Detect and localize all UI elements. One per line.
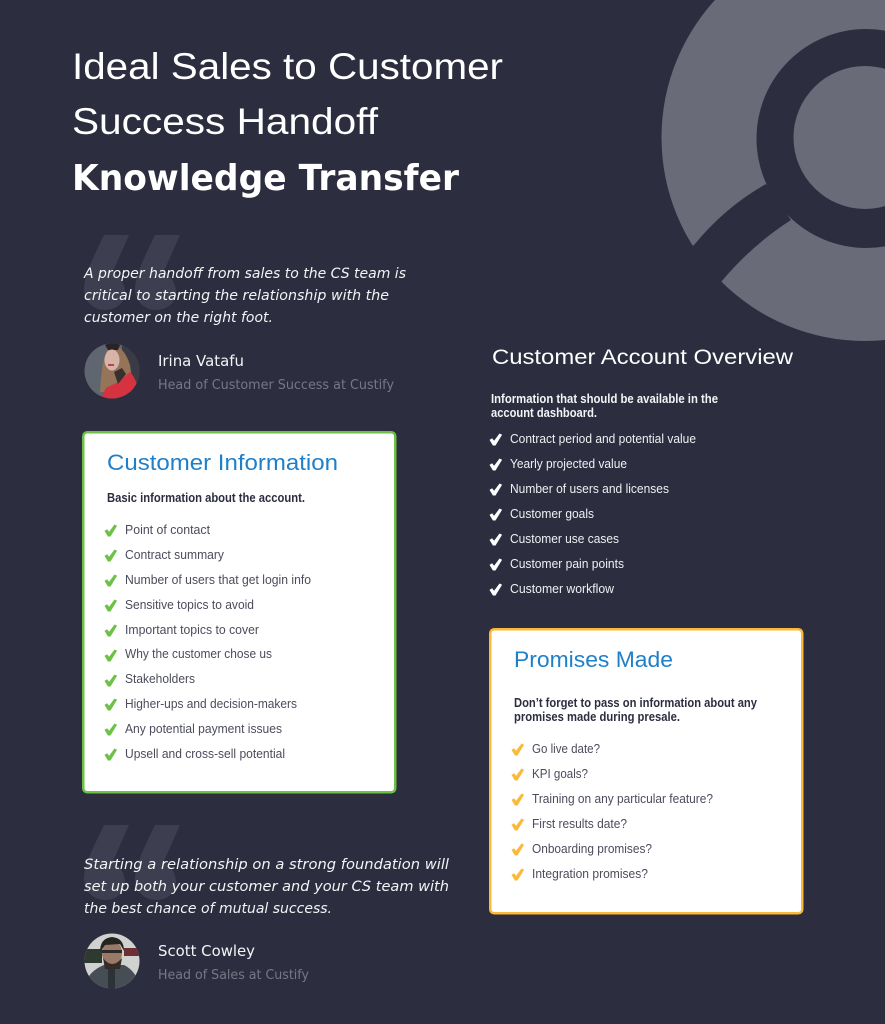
quote text: set up both your customer and your CS team with	[84, 879, 449, 895]
attribution: Irina Vatafu	[158, 352, 244, 370]
quote: Irina Vatafu	[83, 235, 406, 400]
checklist: Important topics to cover	[125, 623, 259, 637]
quote text: critical to starting the relationship with the	[84, 288, 389, 304]
icons: yellow checks	[512, 744, 524, 880]
intro text	[514, 696, 757, 724]
intro text: Basic information about the account.	[107, 491, 305, 505]
checklist: Point of contact	[125, 523, 211, 537]
checklist: Customer workflow	[510, 582, 615, 596]
checklist: Sensitive topics to avoid	[125, 598, 254, 612]
checklist: Onboarding promises?	[532, 842, 652, 856]
checklist: First results date?	[532, 817, 627, 831]
checklist: KPI goals?	[532, 767, 588, 781]
checklist: Yearly projected value	[510, 457, 627, 471]
title	[72, 46, 503, 199]
intro text	[491, 392, 718, 420]
attribution	[158, 352, 394, 393]
title: Ideal Sales to Customer	[72, 46, 503, 87]
checklist: Customer goals	[510, 507, 594, 521]
attribution: Head of Customer Success at Custify	[158, 378, 394, 393]
checklist: Contract period and potential value	[510, 432, 696, 446]
quote text: the best chance of mutual success.	[84, 901, 332, 917]
checklist	[532, 742, 713, 881]
heading: Promises Made	[514, 647, 673, 672]
attribution: Head of Sales at Custify	[158, 968, 309, 983]
checklist: Any potential payment issues	[125, 722, 282, 736]
checklist	[510, 432, 696, 596]
checklist	[125, 523, 311, 761]
quote text: A proper handoff from sales to the CS team is	[83, 266, 406, 282]
checklist: Integration promises?	[532, 867, 648, 881]
panel: customer account overview	[490, 345, 794, 596]
icons: white checks	[490, 434, 502, 596]
checklist: Customer pain points	[510, 557, 624, 571]
icon: quotation mark	[84, 825, 180, 900]
checklist: Stakeholders	[125, 672, 195, 686]
intro text: Information that should be available in the	[491, 392, 718, 406]
icon: quotation mark	[84, 235, 180, 310]
panel: customer information	[83, 432, 395, 792]
quote text	[84, 857, 449, 917]
quote text: Starting a relationship on a strong foundation will	[84, 857, 449, 873]
checklist: Number of users and licenses	[510, 482, 669, 496]
heading: Customer Information	[107, 450, 338, 475]
quote: Scott Cowley	[84, 825, 449, 991]
intro text: promises made during presale.	[514, 710, 680, 724]
checklist: Why the customer chose us	[125, 647, 272, 661]
icons: green checks	[104, 524, 117, 760]
portrait: Scott Cowley	[84, 933, 140, 991]
heading: Customer Account Overview	[492, 345, 794, 369]
intro text: account dashboard.	[491, 406, 597, 420]
quote text: customer on the right foot.	[84, 310, 273, 326]
checklist: Upsell and cross-sell potential	[125, 747, 285, 761]
portrait: Irina Vatafu	[84, 343, 140, 400]
checklist: Higher-ups and decision-makers	[125, 697, 297, 711]
checklist: Number of users that get login info	[125, 573, 311, 587]
title: Success Handoff	[72, 101, 379, 142]
checklist: Training on any particular feature?	[532, 792, 713, 806]
decorative logo mark	[662, 0, 885, 341]
checklist: Contract summary	[125, 548, 225, 562]
intro text: Don’t forget to pass on information about any	[514, 696, 757, 710]
attribution: Scott Cowley	[158, 942, 255, 960]
checklist: Customer use cases	[510, 532, 619, 546]
panel: promises made	[490, 629, 802, 913]
attribution	[158, 942, 309, 983]
quote text	[83, 266, 406, 326]
title: Knowledge Transfer	[72, 158, 459, 199]
checklist: Go live date?	[532, 742, 600, 756]
